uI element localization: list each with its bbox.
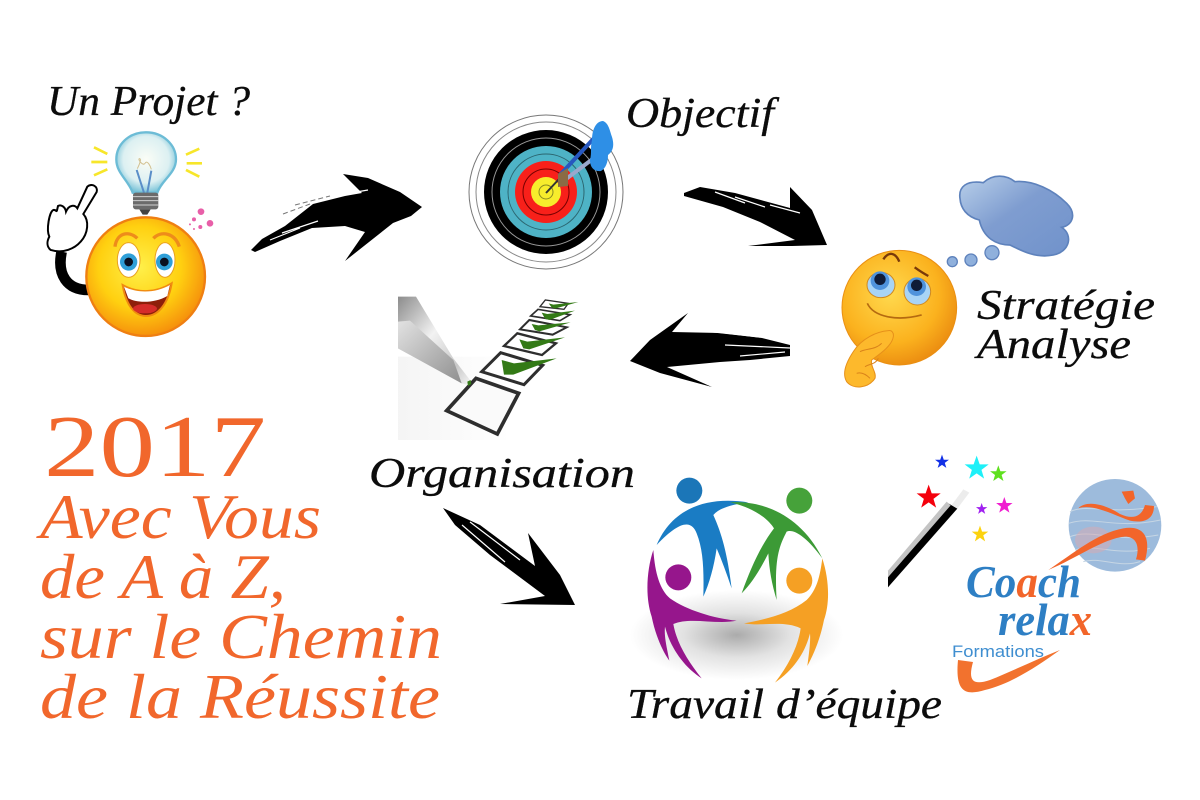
headline line 1: Avec Vous [36,481,321,552]
label: Travail d'équipe: Travail d’équipe [627,682,942,728]
dart [546,121,613,193]
head: blue [676,478,702,504]
heading: Un Projet ?: Un Projet ? [47,79,250,125]
logo: Coach Relax Formations [952,479,1161,692]
pen [398,297,471,386]
green check marks [502,302,578,375]
checkbox rows [447,300,570,434]
icon: checklist with pen [398,297,578,440]
headline line 3: sur le Chemin [40,601,442,672]
arrow: projet to objectif [251,174,422,261]
hand [47,185,97,251]
panel: un projet [47,79,250,336]
icon: team of four figures [630,478,843,683]
stars [917,455,1013,541]
head: green [786,488,812,514]
arrow: organisation to travail [443,508,575,605]
headline line 4: de la Réussite [40,661,440,732]
shadow [630,590,843,680]
head: purple [665,564,691,590]
background [398,357,510,440]
thinking hand [845,331,893,387]
heading: Objectif: Objectif [626,91,780,137]
figure: purple [647,550,737,678]
arm [60,252,88,290]
icon: target with dart [469,115,623,269]
sparkle dots [189,208,213,230]
logo wordmark: Coach relax [966,556,1092,645]
panel: organisation [369,297,635,497]
figure: green [730,502,822,600]
label: Stratégie: Stratégie [977,283,1155,329]
bulb rays [91,147,202,177]
panel: strategie [842,176,1155,387]
panel: objectif [36,91,1161,732]
label: Organisation: Organisation [369,451,635,497]
headline line 2: de A à Z, [40,541,286,612]
logo word: Formations: Formations [952,642,1044,661]
headline year: 2017 [44,399,266,496]
wand [888,489,969,587]
icon: thinking cloud [947,176,1073,267]
logo globe [1048,479,1161,572]
figure: blue [657,501,748,597]
label: Analyse: Analyse [974,322,1131,368]
logo swoosh [957,650,1060,692]
icon: magic wand with stars [888,455,1013,587]
face [86,217,205,336]
target rings [469,115,623,269]
arrow: strategie to organisation [630,313,790,387]
panel: travail d'equipe [627,478,942,728]
light bulb [116,132,176,215]
headline: 2017 avec vous [36,399,442,732]
logo wordmark: Coach relax: Coach [966,556,1081,607]
arrow: objectif to strategie [684,187,827,246]
icon: thinking emoji [842,250,957,387]
logo wordmark: Coach relax: relax [998,594,1092,645]
figure: orange [744,558,828,683]
head: orange [786,568,812,594]
icon: idea emoji with light bulb [47,132,213,336]
